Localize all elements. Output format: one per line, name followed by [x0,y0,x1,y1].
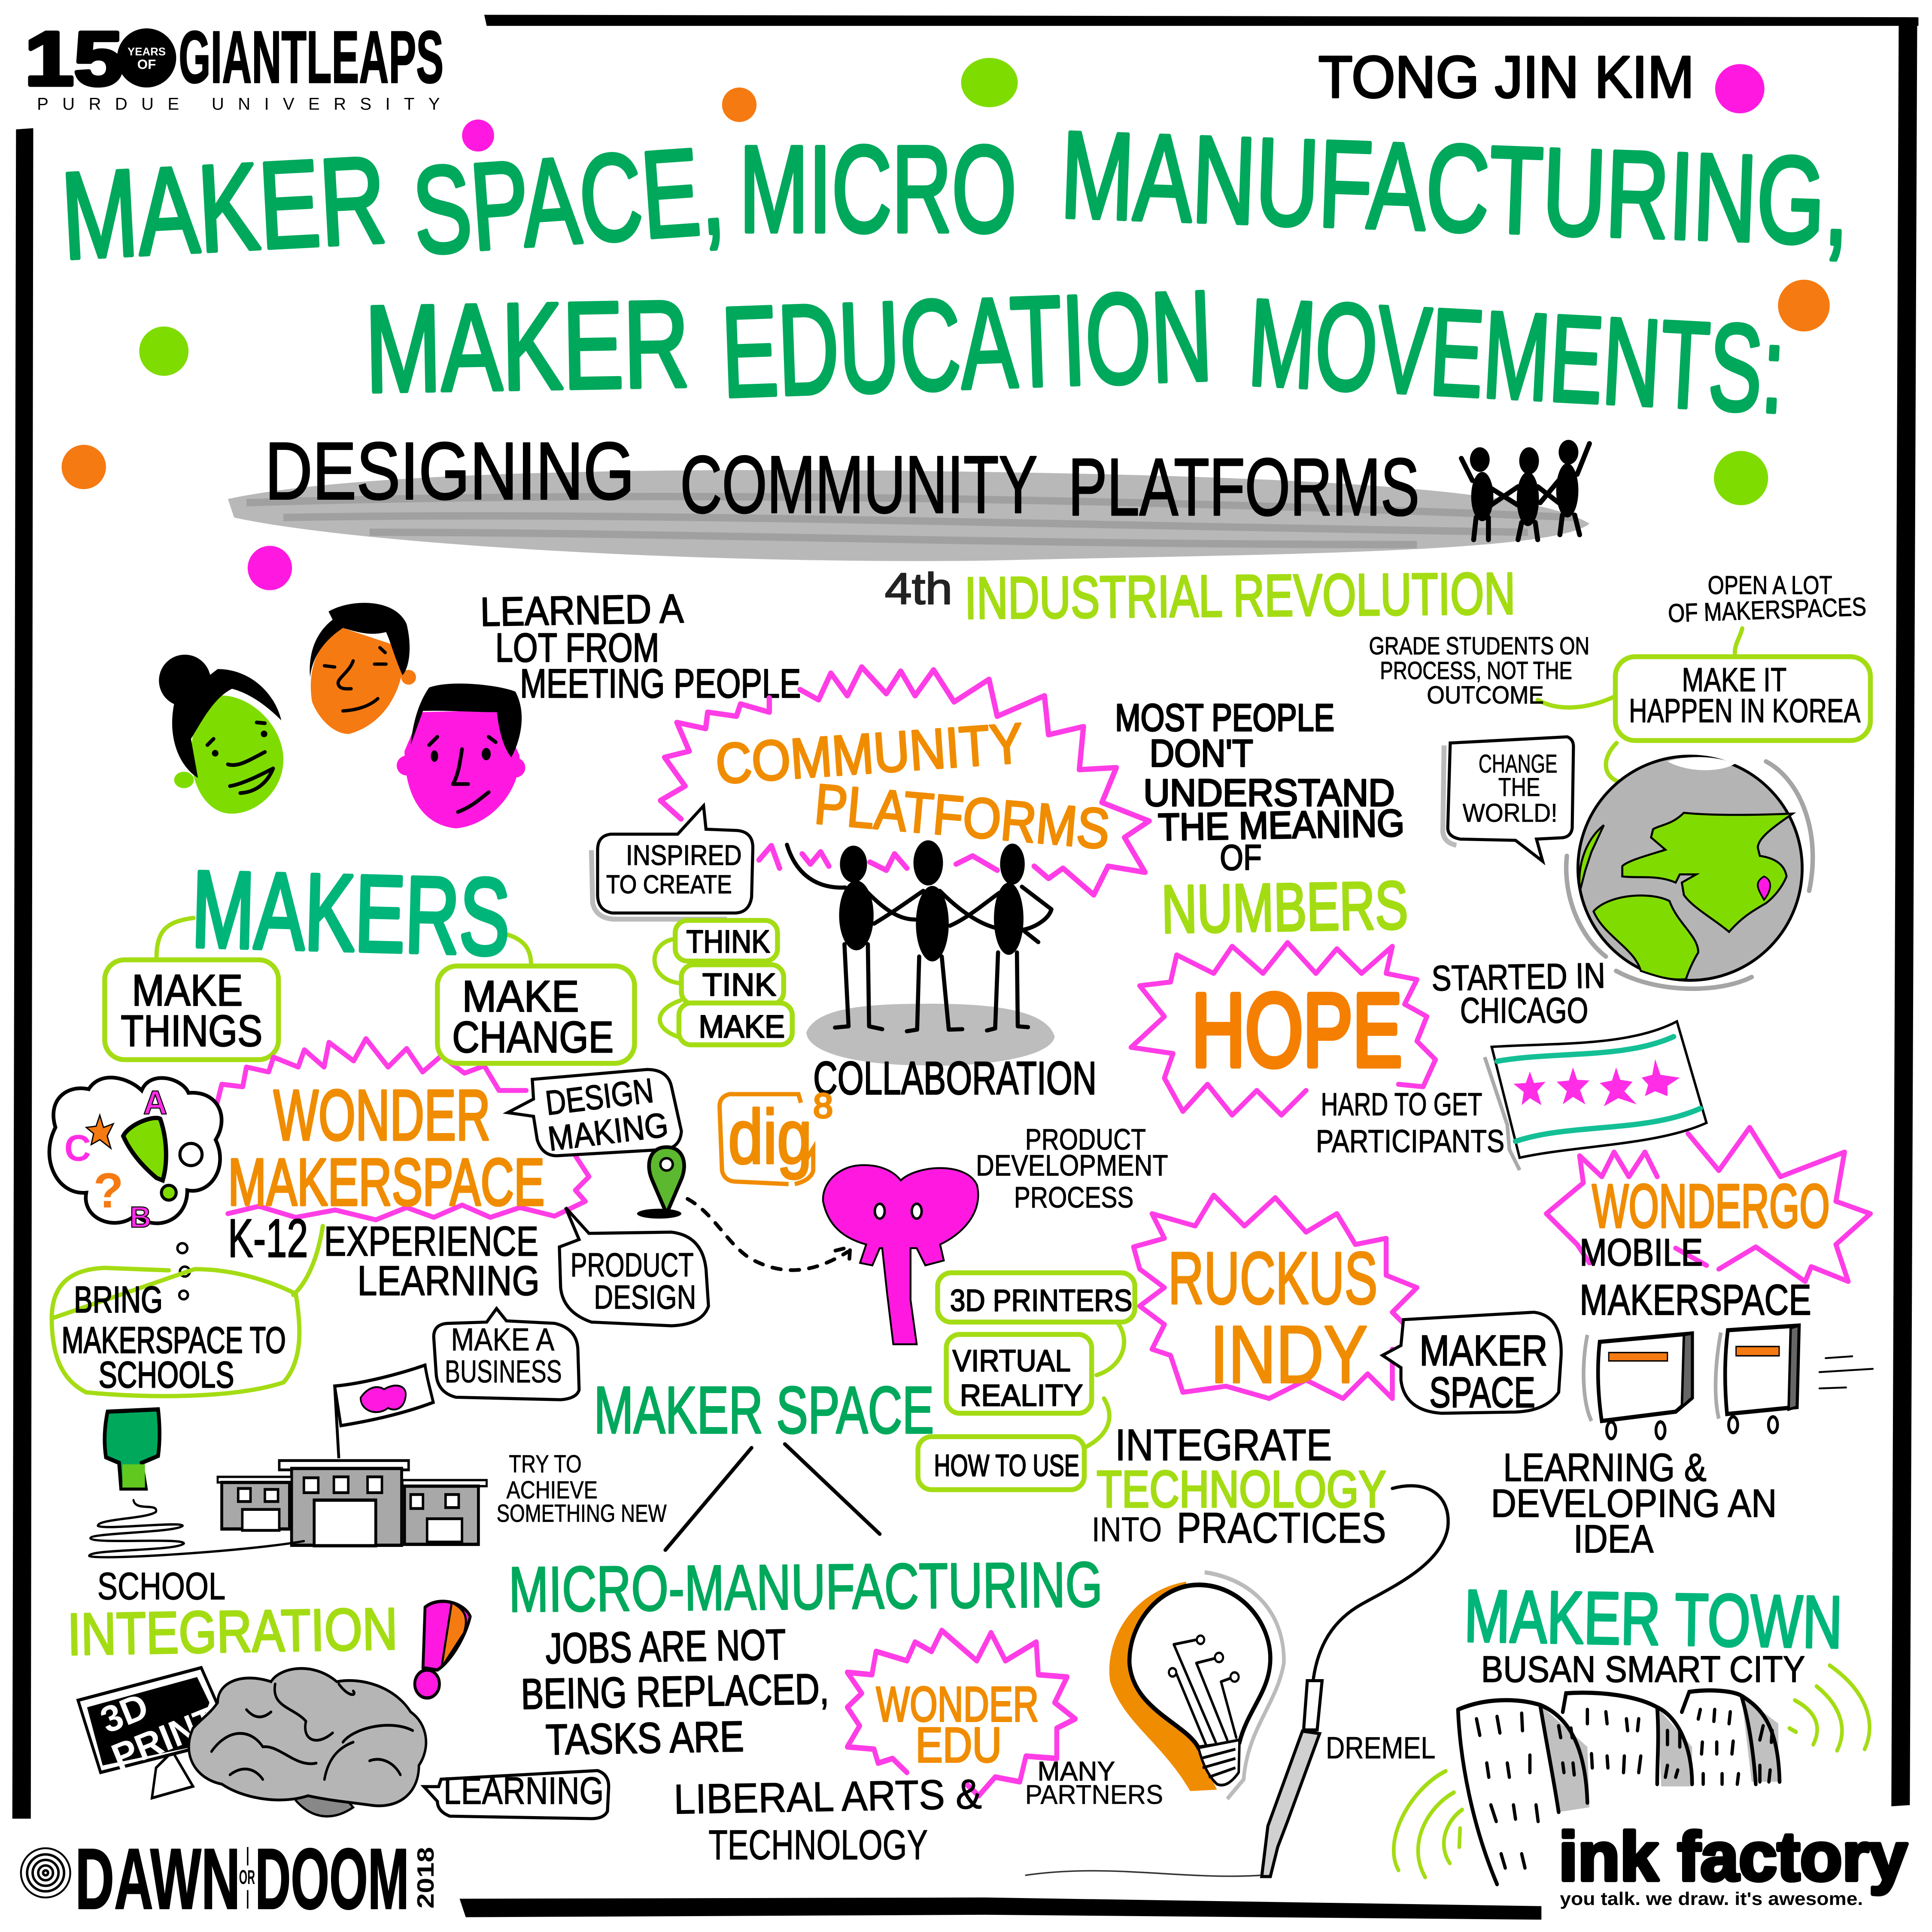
box: make things: MAKE [132,965,243,1015]
box: make change [437,966,635,1063]
text: product development process: DEVELOPMENT [976,1149,1168,1182]
logo: dawn or doom 2018: DOOM [255,1830,409,1927]
starburst: wondergo [1546,1127,1871,1282]
text: make it happen in Korea box and notes: OF MAKERSPACES [1668,592,1867,628]
text: K-12 experience learning: K-12 [228,1208,308,1268]
face: green woman with bun [159,655,283,814]
heading: 4th industrial revolution: INDUSTRIAL REVOLUTION [964,560,1516,632]
stacked boxes: think tink make: TINK [702,966,776,1002]
title: SPACE, [409,121,728,280]
icon: mobile makerspace carts [1583,1325,1873,1439]
icon: three people [1461,440,1589,540]
logo box: dig8: 8 [813,1087,833,1125]
stacked boxes: think tink make: THINK [687,923,770,959]
text: jobs are not being replaced [520,1621,829,1764]
icon: thought cloud with symbols: A [143,1084,167,1121]
text: learning and developing an idea: IDEA [1574,1517,1654,1561]
text: product development process [976,1123,1168,1214]
boxes: 3D printers, virtual reality, how to use [918,1273,1135,1490]
text: product development process: PRODUCT [1025,1123,1146,1156]
callout: product design: PRODUCT [571,1247,694,1284]
text: hard to get participants: HARD TO GET [1321,1086,1482,1122]
icon: thought cloud with symbols: C [64,1127,91,1169]
icon: Chicago flag [1485,1021,1707,1170]
text: most people don't understand the meaning of: OF [1220,838,1262,878]
stacked boxes: think tink make: MAKE [699,1008,785,1044]
text: jobs are not being replaced: TASKS ARE [545,1713,744,1764]
faces of three people [159,603,525,828]
stacked boxes: think tink make [655,920,792,1045]
icon: 3D print sign and brain cloud: PRINT [106,1698,224,1778]
text: learning and developing an idea: LEARNING & [1503,1446,1707,1490]
text: started in Chicago [1431,955,1606,1030]
subtitle on grey brush stroke: DESIGNING [265,426,635,516]
text: K-12 experience learning: LEARNING [357,1257,540,1304]
callout: learning: LEARNING [444,1769,604,1812]
text: jobs are not being replaced: JOBS ARE NOT [545,1621,786,1673]
starburst: hope [1131,942,1435,1115]
logo: dawn or doom 2018: OR [239,1866,255,1888]
callout: design making: DESIGN [543,1071,656,1123]
starburst: hope: HOPE [1191,972,1402,1088]
logo: 150 years of giant leaps, Purdue University [24,16,444,113]
text: make it happen in Korea box and notes: PROCESS, NOT THE [1380,657,1572,684]
starburst: wonder edu: EDU [915,1718,1002,1773]
starburst: wonder edu [848,1631,1075,1796]
icon: smart city buildings with signal waves [1394,1665,1870,1884]
text: make it happen in Korea box and notes: OPEN A LOT [1708,570,1832,599]
text: integrate technology into practices: INTEGRATE [1115,1420,1332,1470]
text: school integration: SCHOOL [97,1564,225,1607]
logo: 150 years of giant leaps, Purdue University: 15 [24,16,123,101]
icon: three collaborating figures on grey base [787,840,1055,1066]
heading: wonder makerspace [228,1075,544,1219]
callout: change the world: CHANGE [1479,749,1558,778]
callout: make a business [434,1309,579,1400]
callout: product design: DESIGN [594,1279,696,1316]
starburst: community platforms [660,667,1149,895]
starburst: wonder edu: WONDER [876,1677,1039,1732]
heading: community platforms: PLATFORMS [812,772,1112,861]
face: magenta man [397,683,525,828]
text: make it happen in Korea box and notes: GRADE STUDENTS ON [1369,632,1589,660]
heading: wonder makerspace: MAKERSPACE [228,1145,544,1219]
icon: 3D print sign and brain cloud [78,1668,426,1817]
box: make change: MAKE [462,971,579,1021]
icon: light bulb with circuit [1109,1572,1284,1799]
icon: 3D printer nozzle and printed spiral [89,1410,304,1557]
text: most people don't understand the meaning of: MOST PEOPLE [1115,696,1334,739]
logo: 150 years of giant leaps, Purdue University: YEARS [128,46,166,58]
heading: micro-manufacturing: MICRO-MANUFACTURING [508,1549,1103,1625]
text: started in Chicago: CHICAGO [1460,990,1588,1030]
title: EDUCATION [719,264,1214,424]
logo: ink factory: ink factory [1558,1818,1908,1895]
text: most people don't understand the meaning of [1115,696,1405,878]
callout: change the world [1443,737,1574,861]
box: make things [105,960,279,1060]
logo: 150 years of giant leaps, Purdue University: PURDUE UNIVERSITY [37,94,440,113]
heading: numbers: NUMBERS [1161,868,1409,948]
text: liberal arts and technology [673,1771,982,1868]
subtitle on grey brush stroke: COMMUNITY [680,440,1037,530]
text: product development process: PROCESS [1014,1181,1133,1214]
text: try to achieve something new [497,1451,667,1527]
title: MICRO [739,120,1017,258]
logo: dawn or doom 2018: 2018 [413,1847,439,1908]
callout: make a business: MAKE A [451,1321,555,1357]
callout: design making: MAKING [546,1106,670,1158]
callout: maker space: SPACE [1429,1368,1535,1416]
heading: community platforms: COMMUNITY [714,711,1025,796]
heading: wonder makerspace: WONDER [273,1075,490,1155]
subtitle on grey brush stroke [228,426,1589,561]
text: K-12 experience learning [228,1208,540,1304]
text: integrate technology into practices: INTO [1092,1510,1162,1549]
text: integrate technology into practices: TECHNOLOGY [1097,1460,1386,1518]
title [58,105,1852,439]
starburst: ruckus indy: INDY [1210,1309,1368,1400]
text: most people don't understand the meaning of: THE MEANING [1157,801,1405,848]
text: try to achieve something new: ACHIEVE [507,1476,598,1504]
callout: maker space [1382,1312,1561,1416]
icon: pink elephant [823,1165,978,1344]
text: hard to get participants: PARTICIPANTS [1316,1123,1504,1159]
text: liberal arts and technology: LIBERAL ARTS & [673,1771,982,1823]
makers heading and branches [105,848,531,1060]
text: learned a lot from meeting people: MEETING PEOPLE [520,661,801,706]
box: make things: THINGS [121,1006,262,1056]
text: jobs are not being replaced: BEING REPLACED, [520,1665,829,1719]
text: busan smart city: BUSAN SMART CITY [1481,1649,1805,1690]
heading: maker space with branches: MAKER SPACE [594,1373,934,1447]
callout: maker space: MAKER [1419,1327,1548,1375]
face: orange man [310,603,416,734]
heading: 4th industrial revolution [885,560,1516,632]
text: many partners [1025,1756,1163,1810]
text: learned a lot from meeting people: LOT FROM [495,625,659,671]
icon: 3D print sign and brain cloud: 3D [95,1685,154,1741]
box: bring makerspace to schools [52,1226,323,1396]
text: make it happen in Korea box and notes: MAKE IT [1682,662,1786,699]
text: many partners: PARTNERS [1025,1780,1163,1810]
title: MAKER [364,274,690,418]
box: make change: CHANGE [452,1012,614,1062]
heading: 4th industrial revolution: 4th [885,563,952,613]
starburst: ruckus indy: RUCKUS [1168,1237,1378,1319]
logo: 150 years of giant leaps, Purdue University: GIANTLEAPS [179,16,444,98]
text: most people don't understand the meaning of: UNDERSTAND [1143,771,1395,814]
arrow: dashed path to elephant [687,1199,850,1270]
icon: thought cloud with symbols: B [130,1200,151,1233]
logo: ink factory: you talk. we draw. it's awesome. [1560,1889,1863,1909]
icon: thought cloud with symbols [49,1078,222,1299]
decorative coloured dots [61,58,1830,590]
text: school integration [67,1564,398,1668]
text: liberal arts and technology: TECHNOLOGY [708,1822,928,1868]
icon: map pin [637,1147,684,1218]
heading: community platforms [714,711,1112,861]
callout: change the world: THE [1498,772,1540,802]
text: many partners: MANY [1037,1756,1115,1786]
boxes: 3D printers, virtual reality, how to use: 3D PRINTERS [950,1284,1132,1318]
text: try to achieve something new: SOMETHING NEW [497,1500,667,1527]
text: started in Chicago: STARTED IN [1431,955,1606,998]
text: learned a lot from meeting people [480,586,801,706]
boxes: 3D printers, virtual reality, how to use: VIRTUAL [952,1344,1071,1378]
subtitle on grey brush stroke: PLATFORMS [1068,442,1419,533]
icon: exclamation mark [415,1601,470,1698]
callout: inspired to create [592,806,753,919]
text: most people don't understand the meaning of: DON'T [1150,732,1253,775]
logo: dawn or doom 2018 [21,1830,439,1927]
makers heading and branches: MAKERS [190,848,511,978]
text: try to achieve something new: TRY TO [509,1451,582,1478]
callout: inspired to create: INSPIRED [626,839,742,871]
logo: 150 years of giant leaps, Purdue University: OF [137,57,156,72]
title: MAKER [58,131,389,285]
box: bring makerspace to schools: SCHOOLS [99,1355,234,1396]
text: mobile makerspace: MOBILE [1580,1230,1703,1273]
logo box: dig8: dig [728,1094,812,1179]
text: school integration: INTEGRATION [67,1596,398,1668]
starburst: wonder makerspace [216,1039,589,1220]
text: integrate technology into practices: PRACTICES [1177,1504,1386,1552]
text: mobile makerspace [1580,1230,1811,1324]
callout: inspired to create: TO CREATE [606,870,732,899]
box: bring makerspace to schools: MAKERSPACE TO [61,1320,286,1361]
boxes: 3D printers, virtual reality, how to use: REALITY [960,1379,1083,1413]
icon: fingerprint [21,1848,70,1898]
text: make it happen in Korea box and notes [1369,570,1871,782]
starburst: ruckus indy [1133,1195,1417,1400]
icon: thought cloud with symbols: ? [93,1163,124,1218]
callout: change the world: WORLD! [1463,798,1558,827]
box: bring makerspace to schools: BRING [74,1279,163,1320]
icon: dremel tool with cord [1025,1486,1448,1877]
callout: product design [559,1207,708,1326]
logo: dawn or doom 2018: DAWN [75,1830,240,1927]
callout: learning [424,1769,609,1819]
text: mobile makerspace: MAKERSPACE [1580,1276,1811,1324]
text: collaboration: COLLABORATION [813,1052,1097,1104]
heading: maker space with branches [594,1373,934,1550]
callout: design making [507,1069,681,1158]
icon: school with apple flag [89,1365,486,1557]
text: learning and developing an idea: DEVELOPING AN [1491,1482,1777,1525]
callout: make a business: BUSINESS [445,1353,562,1389]
text: make it happen in Korea box and notes: OUTCOME [1427,682,1544,709]
text: learned a lot from meeting people: LEARNED A [480,586,684,635]
text: make it happen in Korea box and notes: HAPPEN IN KOREA [1629,693,1861,729]
text: integrate technology into practices [1092,1420,1386,1552]
icon: globe with Korea pin [1566,756,1813,989]
speaker name: TONG JIN KIM [1318,44,1694,110]
text: K-12 experience learning: EXPERIENCE [324,1218,538,1264]
boxes: 3D printers, virtual reality, how to use: HOW TO USE [934,1449,1079,1483]
text: learning and developing an idea [1491,1446,1777,1561]
text: dremel: DREMEL [1326,1731,1435,1765]
text: hard to get participants [1316,1086,1504,1159]
